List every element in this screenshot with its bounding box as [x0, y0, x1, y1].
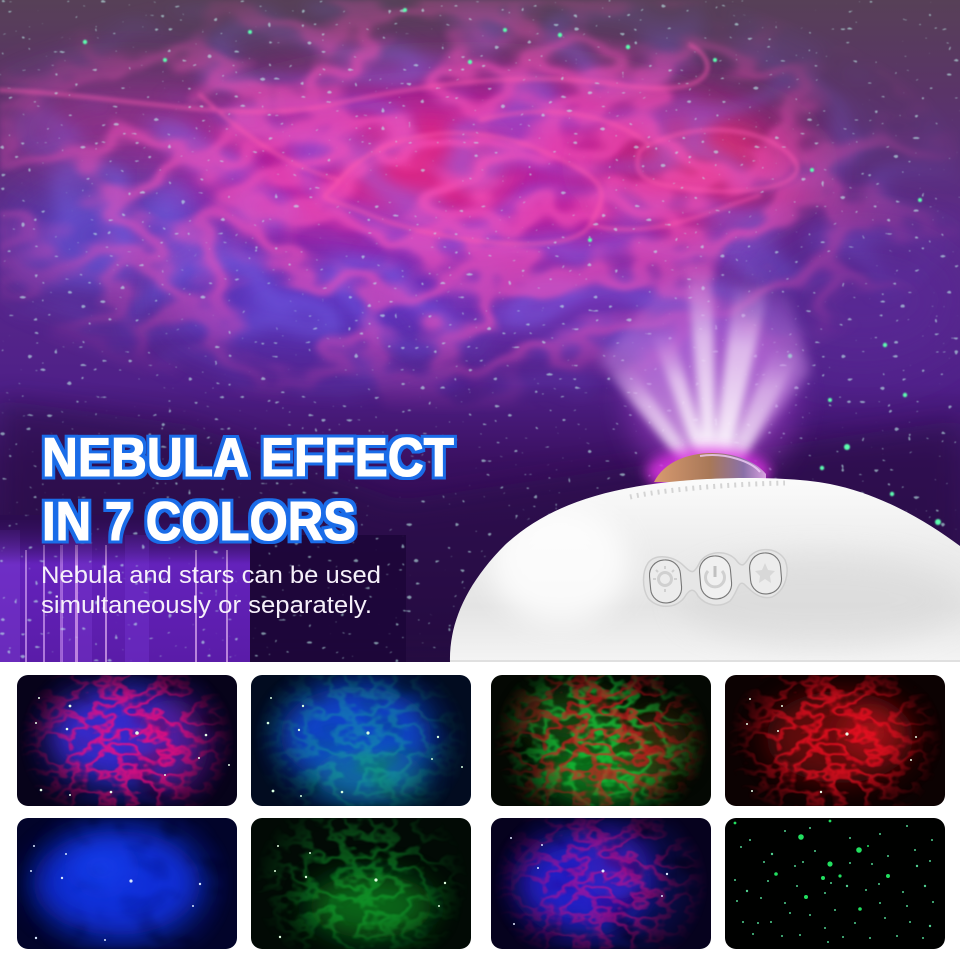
panel: thumbnail deep blue nebula [17, 818, 237, 949]
speaker grille [630, 483, 785, 497]
ceiling sky background [0, 0, 960, 662]
icon: light button [648, 559, 683, 604]
projector light beams [600, 250, 810, 490]
panel: hero nebula projection scene [0, 0, 960, 662]
control buttons [644, 550, 787, 606]
projector white body [450, 478, 960, 662]
small star grid [734, 825, 934, 943]
nebula highlight strands [0, 45, 797, 244]
icon: star button [748, 552, 783, 595]
bottom body shadow line [450, 660, 960, 662]
panel: thumbnail green and red nebula [491, 675, 711, 806]
stars [746, 698, 917, 793]
panel: thumbnail red nebula [725, 675, 945, 806]
panel: thumbnail green star grid [725, 818, 945, 949]
stars [35, 697, 230, 796]
green stars [83, 8, 941, 525]
icon: projector dome with glow [646, 448, 770, 496]
subheading line 1: Nebula and stars can be used [41, 562, 381, 589]
stars [267, 697, 463, 797]
panel: thumbnail blue and teal nebula [251, 675, 471, 806]
stars [510, 837, 668, 925]
stars [274, 845, 446, 938]
heading line 1: NEBULA EFFECT [42, 426, 454, 488]
purple curtains [0, 515, 250, 662]
room walls and ceiling shadow [0, 394, 960, 582]
panel: thumbnail purple and magenta nebula [17, 675, 237, 806]
subheading line 2: simultaneously or separately. [41, 592, 372, 619]
star field [0, 0, 960, 662]
nebula colour clouds [0, 70, 960, 370]
nebula vein texture [0, 0, 951, 407]
icon: power button [698, 555, 733, 600]
heading line 2: IN 7 COLORS [42, 490, 356, 552]
heading: nebula effect in 7 colors [42, 426, 454, 552]
large green stars [734, 820, 890, 911]
subheading text [41, 562, 381, 619]
stars [30, 845, 201, 941]
panel: thumbnail blue and violet nebula [491, 818, 711, 949]
panel: thumbnail green nebula [251, 818, 471, 949]
dark window section [250, 535, 406, 662]
